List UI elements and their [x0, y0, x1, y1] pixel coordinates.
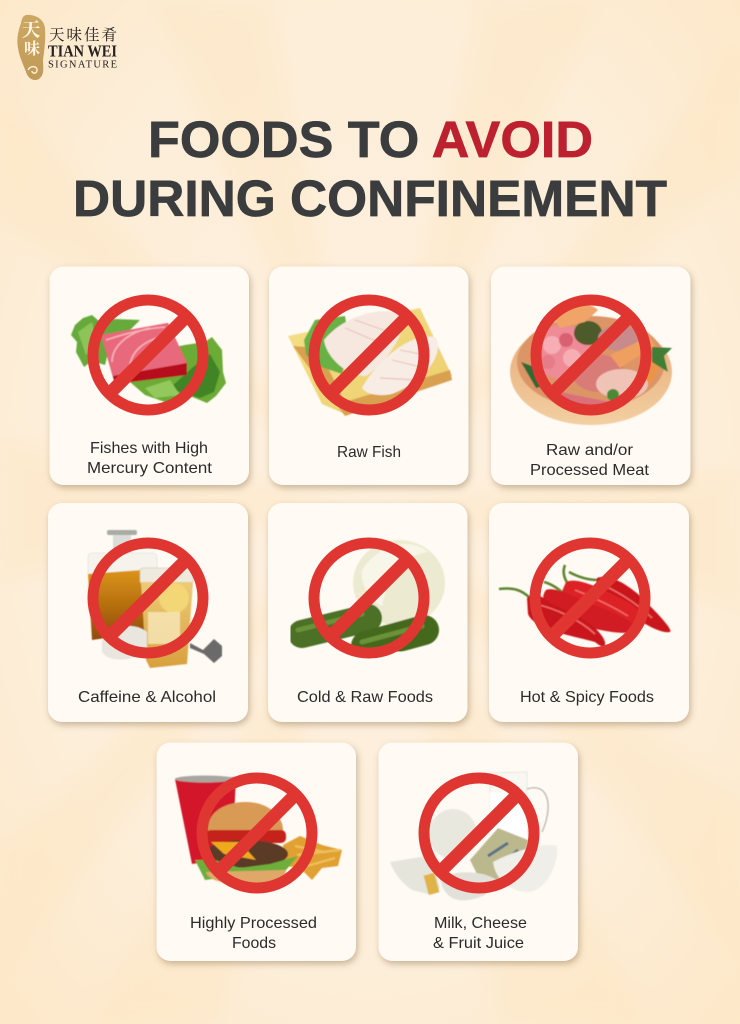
title [73, 111, 667, 227]
panel: caffeine and alcohol [48, 503, 248, 722]
label: Foods [232, 935, 276, 952]
label: Cold & Raw Foods [297, 689, 433, 706]
logo: Tian Wei Signature [17, 15, 117, 80]
panel: fishes with high mercury content [50, 266, 249, 485]
panel: raw fish [269, 266, 468, 485]
icon: prohibition sign [314, 300, 424, 410]
image: burger, cola and fries [175, 776, 342, 884]
icon: prohibition sign [93, 300, 203, 410]
label [530, 442, 650, 479]
label: Milk, Cheese [434, 915, 527, 932]
image: tuna on lettuce [71, 315, 226, 403]
image: meat platter [510, 305, 672, 425]
label [433, 915, 527, 952]
logo chinese name: 天味佳肴 [49, 26, 117, 44]
logo mark: gold brush shape [17, 15, 45, 80]
label [87, 440, 213, 477]
logo subtitle: SIGNATURE [48, 60, 117, 70]
logo mark: gold brush shape: 天 [21, 15, 41, 42]
image: drinks [88, 530, 222, 668]
icon: prohibition sign [424, 778, 534, 888]
title line 2: DURING CONFINEMENT [73, 170, 667, 227]
image: raw fish fillets on board [288, 308, 452, 416]
image: dairy products [390, 772, 557, 900]
label: Mercury Content [87, 460, 213, 477]
icon: prohibition sign [93, 543, 203, 653]
icon: prohibition sign [535, 543, 645, 653]
logo mark: gold brush shape: 味 [24, 36, 40, 59]
panel: highly processed foods [156, 742, 356, 961]
label: Fishes with High [90, 440, 208, 457]
icon: prohibition sign [536, 300, 646, 410]
label: Hot & Spicy Foods [520, 689, 654, 706]
icon: prohibition sign [314, 543, 424, 653]
label: Caffeine & Alcohol [78, 689, 216, 706]
logo wordmark: TIAN WEI [48, 42, 117, 60]
icon: prohibition sign [202, 778, 312, 888]
label: Raw Fish [337, 444, 401, 461]
image: red chilies [499, 565, 670, 647]
label: Processed Meat [530, 462, 650, 479]
label: Highly Processed [190, 915, 317, 932]
panel: milk, cheese and fruit juice [378, 742, 578, 961]
panel: hot and spicy foods [489, 503, 689, 722]
label [190, 915, 317, 952]
label: & Fruit Juice [433, 935, 524, 952]
label: Raw and/or [546, 442, 634, 459]
title line 1: FOODS TO AVOID [148, 111, 593, 168]
panel: cold and raw foods [268, 503, 468, 722]
panel: raw and/or processed meat [491, 266, 690, 485]
image: cabbage and cucumbers [298, 540, 445, 646]
